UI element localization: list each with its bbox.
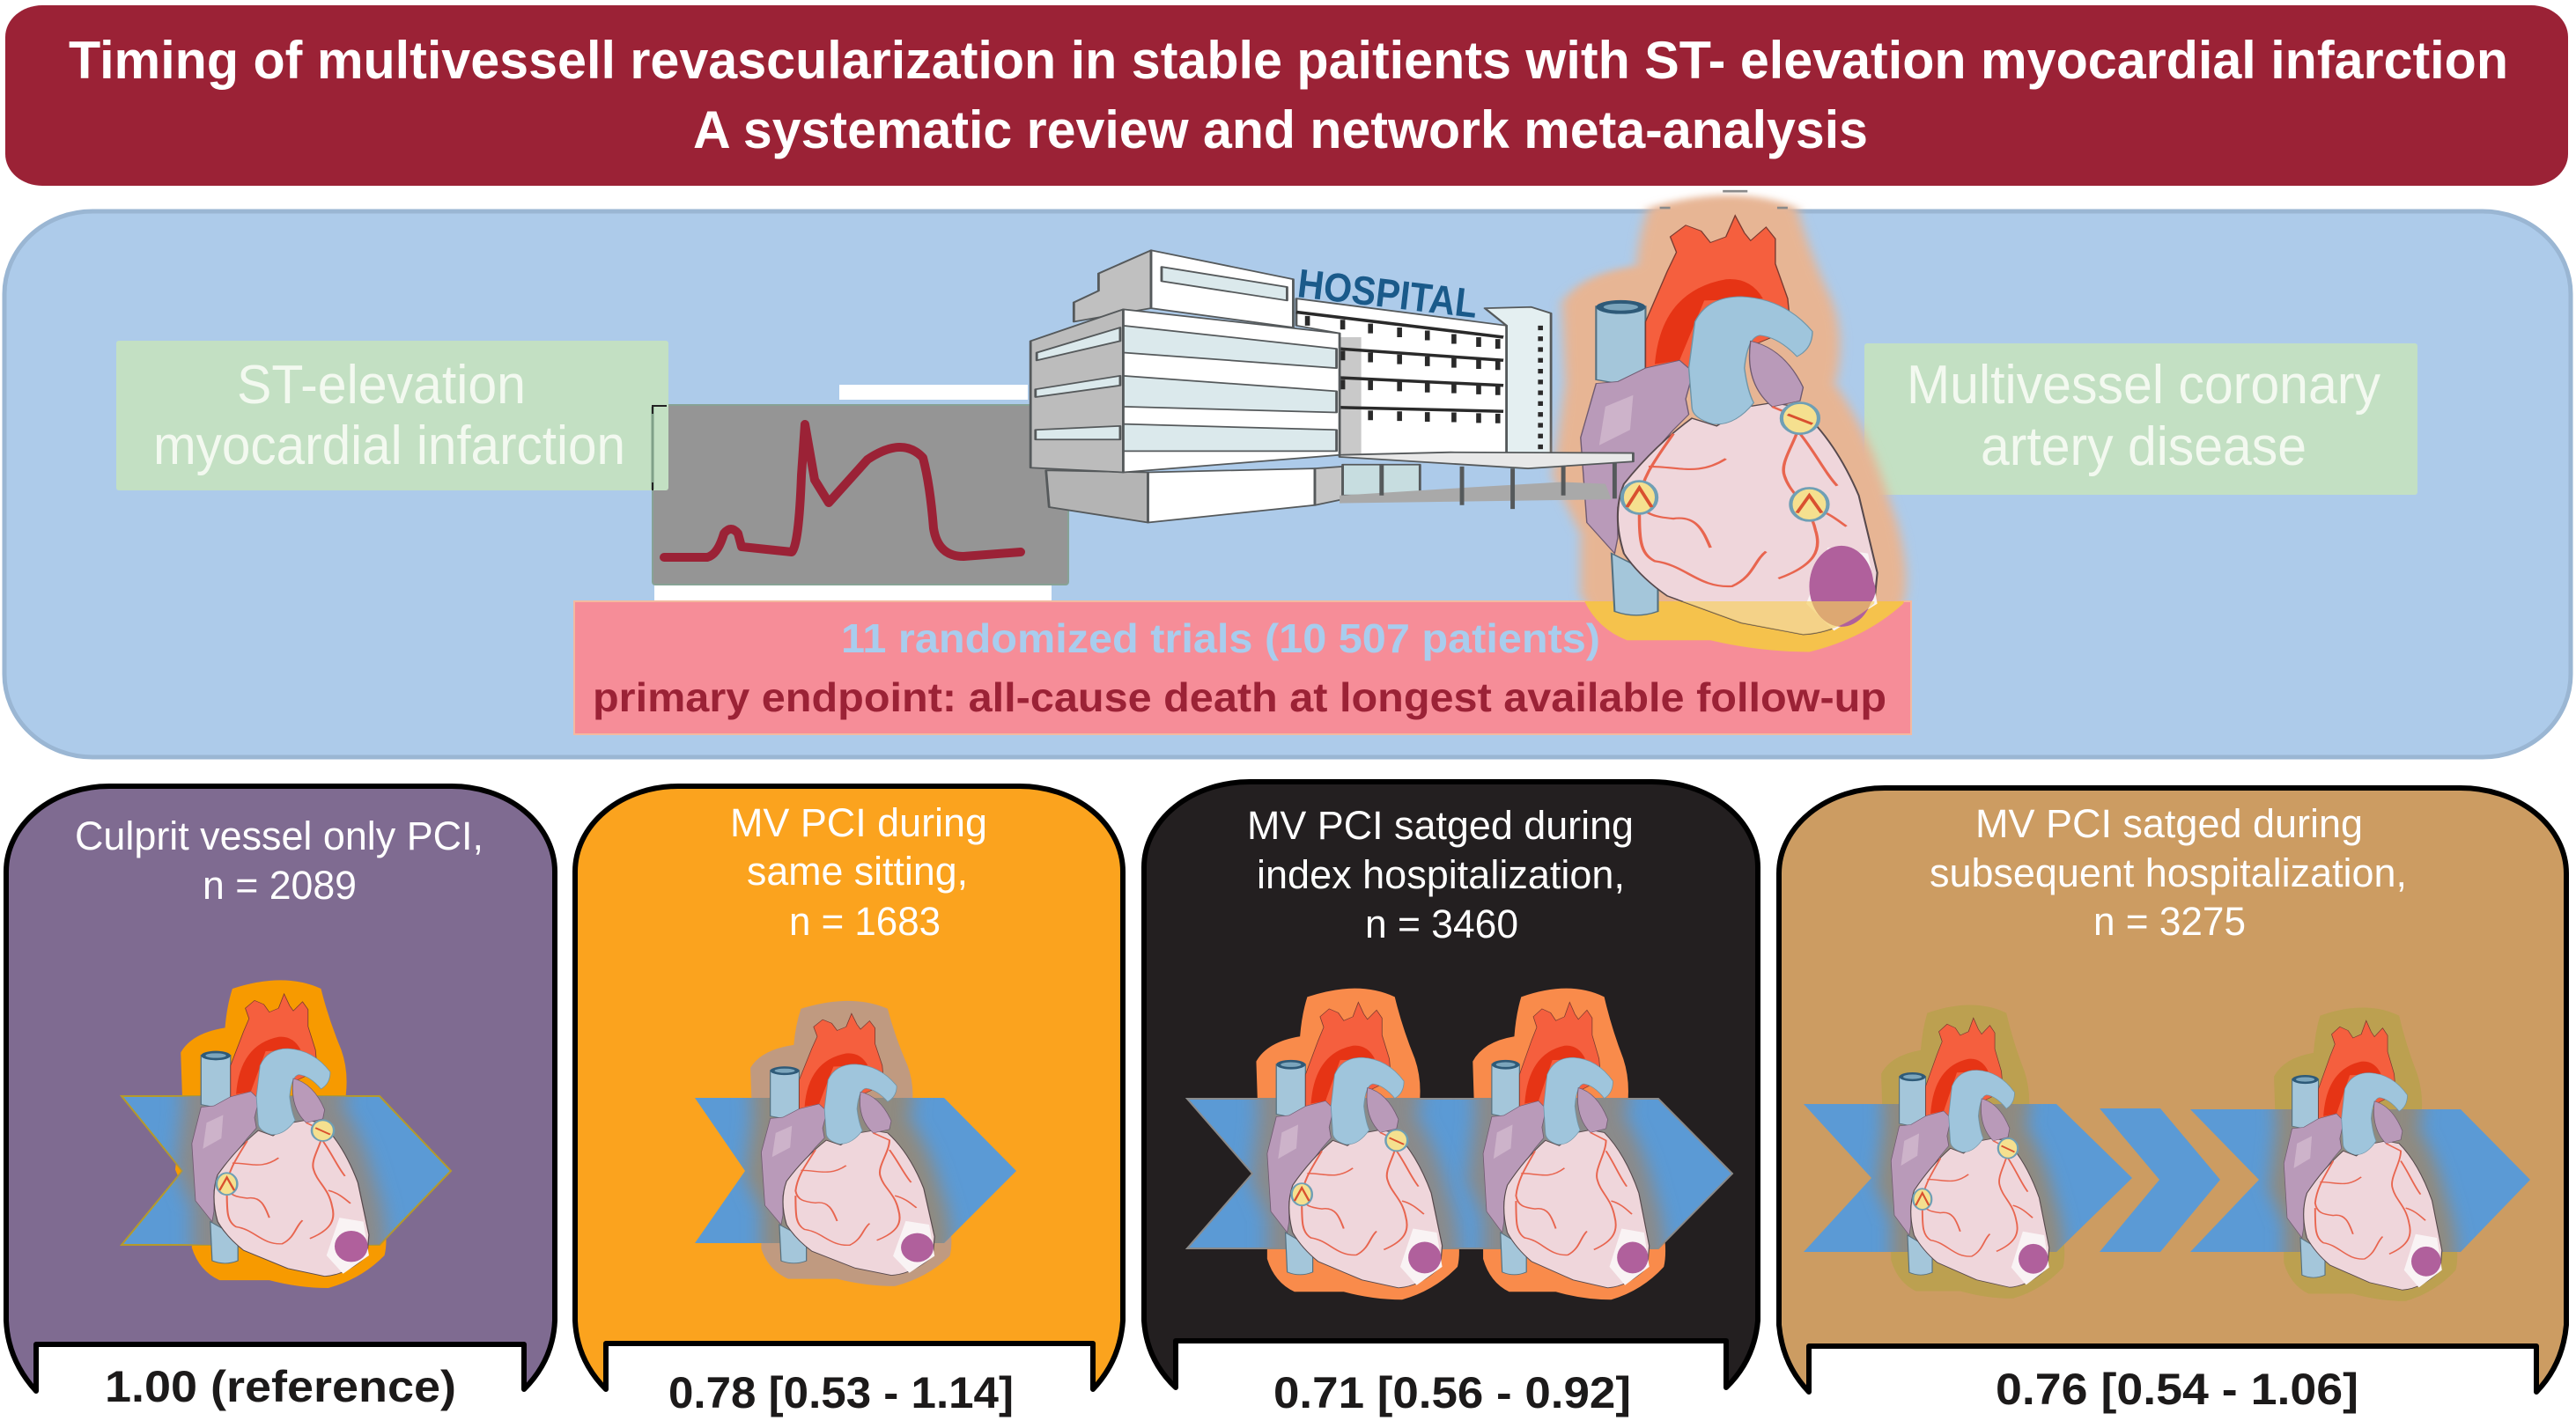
panel: culprit vessel only PCI [6,786,555,1411]
title line 2: A systematic review and network meta-analysis [693,100,1868,159]
panel 2 heading: MV PCI during [730,800,987,845]
panel 2 heading: n = 1683 [789,899,941,944]
text: primary endpoint: primary endpoint: all-cause death at longest available follow-up [593,674,1886,720]
hospital entrance canopy over heart [1340,453,1633,509]
result: reference: 1.00 (reference) [105,1362,456,1411]
icon: two hearts with chevron [1187,989,1732,1299]
panel 3 heading: index hospitalization, [1257,852,1625,897]
icon: single heart with chevron [122,980,451,1288]
result: subsequent hospitalization: 0.76 [0.54 - 1.06] [1996,1365,2358,1414]
panel 3 heading [1247,803,1634,946]
panel 4 heading: subsequent hospitalization, [1930,850,2407,895]
label: multivessel coronary artery disease: artery disease [1981,416,2307,477]
panel 1 heading: Culprit vessel only PCI, [75,813,483,858]
panel: MV PCI staged during subsequent hospitalization [1779,788,2566,1414]
panel 3 heading: MV PCI satged during [1247,803,1634,848]
icon: single heart with chevron [695,1001,1016,1286]
panel 4 heading [1930,801,2407,944]
title banner [5,5,2568,186]
panel: study population [4,191,2571,757]
panel 1 heading: n = 2089 [203,863,357,908]
callout: trials and primary endpoint box [574,601,1911,734]
icon: large heart with stents [1553,191,1906,651]
text: number of trials: 11 randomized trials (10 507 patients) [841,615,1600,661]
panel 2 heading: same sitting, [747,849,968,894]
label: ST-elevation myocardial infarction: myocardial infarction [153,416,625,476]
result: index hospitalization: 0.71 [0.56 - 0.92] [1273,1368,1631,1417]
label: ST-elevation myocardial infarction: ST-elevation [237,355,526,416]
panel 4 heading: n = 3275 [2093,899,2246,944]
white strip above ECG [839,385,1028,400]
label: ST-elevation myocardial infarction [116,341,668,490]
panel 1 heading [75,813,483,908]
title line 1: Timing of multivessell revascularization in stable paitients with ST- elevation myocardial infarction [69,31,2508,90]
panel 4 heading: MV PCI satged during [1975,801,2363,846]
icon: hospital building [1030,250,1551,523]
panel: MV PCI during same sitting [575,786,1123,1417]
panel 2 heading [730,800,987,944]
label: multivessel coronary artery disease [1864,343,2417,495]
result: same sitting: 0.78 [0.53 - 1.14] [668,1368,1014,1417]
hospital sign: HOSPITAL [1295,260,1480,327]
panel: MV PCI staged during index hospitalization [1144,782,1758,1417]
icon: ECG with ST elevation [653,405,1068,585]
label: multivessel coronary artery disease: Multivessel coronary [1907,355,2380,416]
icon: two hearts with three chevrons [1804,1005,2530,1301]
panel 3 heading: n = 3460 [1365,902,1518,946]
white strip below ECG [654,583,1052,602]
